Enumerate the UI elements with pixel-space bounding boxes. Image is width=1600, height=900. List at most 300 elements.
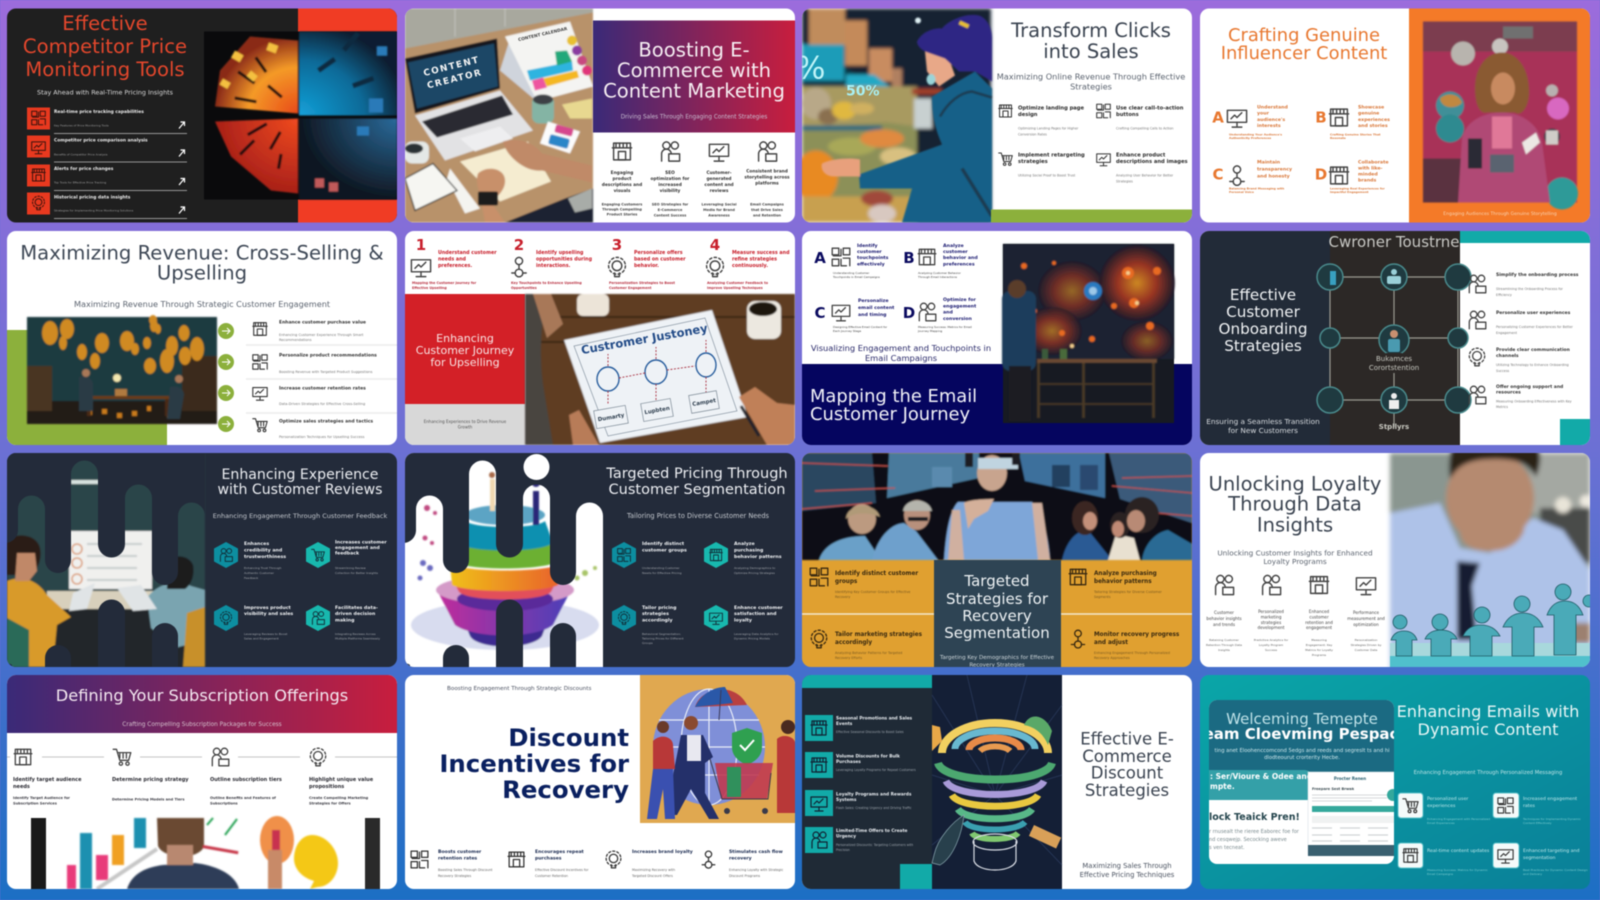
tactics grid: Identify distinct — [642, 541, 685, 547]
item D — [1315, 160, 1389, 194]
item A: audience's — [1257, 117, 1285, 123]
benefits row: Encourages repeat — [535, 849, 585, 855]
panel: Defining Your Subscription Offerings — [7, 675, 397, 889]
item A: effectively — [857, 262, 885, 268]
panel: Targeted Pricing Through Customer Segmentation — [404, 452, 795, 668]
four steps header: refine strategies — [732, 256, 777, 262]
item B — [903, 243, 978, 279]
list text: Increase customer retention rates — [279, 386, 366, 392]
image: email template mockup: s ven tecneat. — [1209, 845, 1245, 851]
four steps header: Personalization Strategies to Boost — [609, 281, 675, 285]
item D: D — [1315, 166, 1327, 184]
panel: Discount Incentives for Recovery — [405, 675, 795, 889]
list text: Optimize sales strategies and tactics — [279, 418, 373, 424]
illustration: layered funnel with people — [405, 453, 603, 667]
four steps header: Customer Engagement — [609, 286, 652, 290]
discount list: Systems — [836, 797, 857, 803]
benefits grid: Leveraging Reviews to Boost — [244, 632, 288, 636]
list text: Enhance customer purchase value — [279, 320, 366, 326]
item C: Balancing Brand Messaging with — [1229, 186, 1284, 190]
onboarding list: Personalizing Customer Experiences for Better — [1496, 325, 1574, 329]
teal top bar — [802, 675, 932, 688]
image: email template mockup: dlodteourut crorterity Hecbe. — [1264, 755, 1340, 761]
strategy tiles: accordingly — [835, 640, 872, 646]
tactics grid: Optimize Pricing Strategies — [734, 571, 775, 575]
onboarding list: channels — [1496, 353, 1519, 359]
title: Commerce — [1082, 747, 1172, 766]
photo: tablet with customer journey: Campet — [692, 398, 717, 408]
title: Recovery — [962, 607, 1032, 625]
discount list: Events — [836, 721, 853, 727]
subtitle: Effective Pricing Techniques — [1080, 871, 1175, 879]
onboarding list: Simplify the onboarding process — [1496, 272, 1579, 278]
feature grid: rates — [1523, 803, 1536, 809]
image: email template mockup: Team Cloevming Pespace — [1195, 725, 1409, 743]
caption: Engaging Audiences Through Genuine Storytelling — [1443, 211, 1557, 217]
benefits row — [411, 849, 783, 878]
item C: Maintain — [1257, 160, 1280, 166]
strategies grid: Use clear call-to-action — [1116, 106, 1184, 112]
discount list: Limited-Time Offers to Create — [836, 828, 908, 834]
item C: Personalize — [858, 298, 889, 304]
title: Competitor Price — [23, 35, 187, 58]
four steps header: opportunities during — [536, 256, 593, 262]
strategies grid: strategies — [1018, 159, 1048, 165]
strategy text: reviews — [710, 188, 729, 194]
image: businessman viewing growth chart — [31, 816, 380, 889]
list: monitoring features: Benefits of Competitor Price Analysis — [54, 152, 108, 156]
tactics grid: Tailor pricing — [642, 605, 676, 611]
item A — [814, 243, 889, 279]
gradient header band — [593, 20, 795, 132]
item D: Collaborate — [1358, 160, 1389, 166]
title: Customer Segmentation — [609, 482, 785, 498]
feature grid: experiences — [1427, 803, 1456, 809]
red title block — [405, 294, 525, 404]
title: Upselling — [157, 262, 247, 284]
benefits row: Boosts customer — [438, 849, 482, 855]
onboarding list: Personalize user experiences — [1496, 310, 1571, 316]
photo: content creator desk — [405, 8, 593, 222]
list descriptions: Boosting Revenue with Targeted Product Suggestions — [279, 370, 373, 374]
benefits grid: Increases customer — [335, 540, 387, 546]
title: Recovery — [502, 775, 629, 804]
strategy tiles: groups — [835, 579, 858, 585]
strategy text: optimization for — [651, 176, 690, 182]
benefits grid: Enhances — [244, 541, 269, 547]
onboarding list: Metrics — [1496, 405, 1508, 409]
tactics grid: Leveraging Data Analytics for — [734, 632, 779, 636]
strategy sub text: Leveraging Social — [701, 202, 737, 206]
title: Segmentation — [944, 624, 1050, 642]
panel: Transform Clicks into Sales — [794, 8, 1192, 222]
panel: Mapping the Email Customer Journey — [802, 231, 1192, 445]
program text: measurement and — [1347, 616, 1385, 621]
item D: minded — [1358, 172, 1378, 178]
four steps header: Analyzing Customer Feedback to — [707, 281, 769, 285]
title: for Upselling — [430, 356, 500, 369]
green footer strip — [991, 210, 1192, 222]
benefits row: Boosting Sales Through Discount — [438, 868, 493, 872]
discount list: Flash Sales: Creating Urgency and Driving Traffic — [836, 806, 912, 810]
strategy tiles: and adjust — [1094, 640, 1128, 646]
benefits row: Discount Programs — [729, 874, 760, 878]
strategies grid: Conversion Rates — [1018, 132, 1047, 136]
title: Through Data — [1227, 492, 1362, 516]
green arrow buttons — [218, 323, 234, 432]
title: Strategies for — [946, 590, 1049, 608]
subtitle: Crafting Compelling Subscription Packages for Success — [122, 722, 282, 728]
item B: behavior and — [943, 255, 978, 261]
item D: and — [943, 310, 953, 316]
item C — [814, 298, 895, 333]
list descriptions — [279, 333, 373, 439]
discount list: Leveraging Loyalty Programs for Repeat Customers — [836, 768, 916, 772]
teal top bar — [1460, 231, 1590, 243]
program text: Personalized — [1258, 609, 1284, 614]
program sub text: Metrics for Loyalty — [1305, 648, 1333, 652]
dark list column — [802, 675, 932, 889]
item B: experiences — [1358, 117, 1390, 123]
title: Enhancing Emails with — [1397, 702, 1579, 721]
benefits row: recovery — [729, 856, 752, 862]
strategy text — [602, 168, 790, 194]
discount list: Urgency — [836, 834, 856, 840]
title: Effective — [1230, 286, 1296, 304]
discount list: Precision — [836, 848, 850, 852]
item B: Through Email Interactions — [917, 275, 958, 279]
subtitle: Boosting Engagement Through Strategic Discounts — [447, 686, 591, 692]
four steps header: Key Touchpoints to Enhance Upselling — [511, 281, 582, 285]
red side block — [298, 8, 397, 222]
caption: Growth — [458, 424, 473, 430]
benefits grid: Integrating Reviews Across — [335, 632, 376, 636]
tactics grid: satisfaction and — [734, 611, 776, 617]
four steps header: 1 — [416, 236, 426, 254]
tactics grid: accordingly — [642, 618, 673, 624]
step text: propositions — [309, 784, 344, 790]
list: monitoring features: Top Tools for Effective Price Tracking — [53, 180, 106, 184]
strategy sub text — [602, 202, 784, 218]
step text: Highlight unique value — [309, 777, 374, 783]
feature grid — [1398, 793, 1588, 876]
photo: tablet with customer journey: Dumarty — [597, 413, 625, 423]
strategy text: descriptions and — [602, 182, 642, 188]
title: Transform Clicks — [1010, 19, 1171, 42]
strategy text: SEO — [665, 170, 675, 176]
icons row — [612, 142, 777, 161]
program sub text: Customer Data — [1355, 648, 1377, 652]
tactics grid: Analyze — [734, 541, 755, 547]
benefits row: Targeted Discount Offers — [631, 874, 673, 878]
strategy sub text: Engaging Customers — [602, 202, 642, 206]
title: Incentives for — [439, 749, 629, 778]
image: email template mockup: ting anet Eloohenccomcond 5edgs and reeds and segreslt ts and hi — [1214, 748, 1390, 754]
item B: genuine — [1358, 110, 1379, 116]
strategy sub text: Content Success — [654, 214, 686, 218]
item C: Each Journey Stage — [833, 329, 861, 333]
shelf sale sign 50 percent: 50% — [846, 84, 880, 100]
calendar text: CONTENT CALENDAR — [518, 26, 569, 43]
item D: Leveraging Real Experiences for — [1330, 186, 1385, 190]
teal corner — [900, 864, 932, 889]
feature grid: Enhanced targeting and — [1523, 848, 1580, 854]
subtitle: Visualizing Engagement and Touchpoints in — [811, 343, 991, 353]
strategy text: Consistent brand — [746, 168, 788, 174]
feature grid: Content Effectively — [1523, 821, 1552, 825]
strategy tiles: Tailoring Strategies for Diverse Customer — [1093, 590, 1163, 594]
strategies grid: Optimize landing page — [1018, 106, 1085, 112]
illustration: striped funnel — [932, 675, 1062, 889]
program sub text: Retention Through Data — [1206, 643, 1242, 647]
onboarding list: Success — [1496, 369, 1510, 373]
strategy tiles: behavior patterns — [1094, 579, 1152, 585]
item B: preferences — [943, 262, 975, 268]
item A: your — [1257, 110, 1270, 116]
four steps header: needs and — [438, 256, 467, 262]
list icons — [253, 323, 267, 432]
title: Targeted — [963, 572, 1030, 590]
strategy text: Engaging — [611, 170, 633, 176]
title: Discount — [1091, 764, 1164, 782]
image: email template mockup: r rnusealt the rieree Eaborec foe for — [1209, 829, 1300, 835]
panel: Effective Customer Onboarding Strategies — [1200, 231, 1590, 445]
panel: Maximizing Revenue Cross-Selling and Upselling — [7, 231, 397, 445]
step text: Outline subscription tiers — [210, 777, 282, 783]
green block — [7, 330, 167, 445]
program text — [1206, 609, 1385, 630]
title: Customer — [1226, 303, 1301, 321]
list: monitoring features: Strategies for Implementing Price Monitoring Solutions — [54, 208, 134, 212]
step sub text — [13, 796, 369, 806]
strategy tiles: Segments — [1094, 595, 1111, 599]
step sub text: Determine Pricing Models and Tiers — [112, 798, 184, 802]
tactics grid: Analyzing Demographics to — [734, 566, 775, 570]
benefits grid: visibility and sales — [244, 611, 293, 617]
item A: Identify — [857, 243, 878, 249]
strategies grid: design — [1018, 112, 1038, 118]
tactics grid: Dynamic Pricing Models — [734, 636, 770, 640]
discount list: Effective Seasonal Discounts to Boost Sales — [836, 730, 904, 734]
four steps header: interactions. — [536, 263, 571, 269]
item C: C — [1212, 166, 1224, 184]
item B: Analyze — [943, 243, 964, 249]
step sub text: Subscriptions — [210, 802, 238, 806]
title: Targeted Pricing Through — [605, 466, 788, 482]
title: Effective — [62, 12, 148, 35]
strategy tiles: Enhancing Engagement Through Personalized — [1094, 651, 1170, 655]
strategy text: visuals — [614, 188, 631, 194]
panel: Targeted Strategies for Recovery Segmentation — [802, 453, 1192, 668]
strategies grid: Enhance product — [1116, 152, 1166, 158]
title: Effective E- — [1080, 730, 1174, 748]
discount list — [805, 715, 916, 853]
teal corner — [1560, 419, 1590, 445]
benefits grid: Authentic Customer — [244, 571, 275, 575]
program sub text — [1206, 638, 1382, 657]
figurines — [1390, 584, 1595, 667]
strategy text: platforms — [755, 180, 779, 186]
strategy text: generated — [706, 176, 732, 182]
image: email template mockup: : Ser/Vioure & Odee and — [1210, 772, 1312, 781]
title: Customer Journey — [416, 344, 515, 357]
benefits row: Stimulates cash flow — [729, 849, 783, 855]
benefits grid: feedback — [335, 550, 360, 556]
list text: Personalize product recommendations — [279, 352, 377, 358]
list descriptions: Personalization Techniques for Upselling Success — [279, 435, 365, 439]
subtitle: Enhancing Engagement Through Personalized Messaging — [1414, 770, 1562, 776]
tactics grid: purchasing — [734, 548, 763, 554]
strategy tiles: Analyzing Behavior Patterns for Targeted — [835, 651, 902, 655]
item B: and stories — [1358, 123, 1388, 129]
item D: Measuring Success: Metrics for Email — [918, 325, 972, 329]
four steps header: Identify upselling — [536, 250, 584, 256]
dark title column — [1200, 231, 1330, 445]
strategy tiles: Monitor recovery progress — [1094, 632, 1180, 638]
four steps header: Mapping the Customer Journey for — [412, 281, 477, 285]
subtitle: Targeting Key Demographics for Effective — [939, 655, 1055, 661]
four steps header — [411, 236, 790, 290]
subtitle: Maximizing Sales Through — [1082, 862, 1172, 870]
item A: customer — [857, 249, 882, 255]
item A: A — [1212, 108, 1224, 126]
tactics grid: loyalty — [734, 618, 752, 624]
tactics grid: Behavioral Segmentation: — [642, 632, 681, 636]
strategy sub text: Media for Brand — [703, 208, 735, 212]
benefits grid: Streamlining Review — [335, 566, 366, 570]
strategy sub text: Awareness — [708, 214, 730, 218]
shelf sale signs: % — [796, 50, 825, 86]
onboarding list: Utilizing Technology to Enhance Onboarding — [1496, 363, 1569, 367]
strategies grid: Implement retargeting — [1018, 152, 1085, 158]
benefits grid: trustworthiness — [244, 554, 286, 560]
benefits grid: Facilitates data- — [335, 605, 378, 611]
dark arch overlay — [404, 452, 603, 668]
photo: tablet with customer journey — [525, 294, 795, 445]
tactics grid: Needs for Effective Pricing — [642, 571, 682, 575]
program sub text: Retaining Customer — [1209, 638, 1240, 642]
list descriptions: Enhancing Customer Experience Through Smart — [279, 333, 364, 337]
caption: Enhancing Experiences to Drive Revenue — [424, 419, 507, 424]
title: Onboarding — [1219, 320, 1307, 338]
program text: optimization — [1353, 622, 1379, 627]
feature grid: Email Experiences — [1427, 821, 1455, 825]
list descriptions: Recommendations — [279, 338, 312, 342]
program text: retention and — [1305, 620, 1333, 625]
subtitle: Loyalty Programs — [1263, 557, 1327, 566]
onboarding list: Efficiency — [1496, 293, 1512, 297]
strategies grid: Strategies — [1116, 180, 1133, 184]
subtitle: Enhancing Engagement Through Customer Feedback — [213, 512, 387, 520]
dark arch overlay — [6, 452, 205, 668]
program sub text: Insights — [1218, 648, 1230, 652]
illustration: shoppers with globe — [640, 675, 795, 823]
image: customer journey network: Bukamces — [1376, 355, 1412, 363]
subtitle: Driving Sales Through Engaging Content Strategies — [621, 114, 767, 120]
four steps header: 2 — [514, 236, 524, 254]
onboarding list: Offer ongoing support and — [1496, 384, 1563, 390]
benefits grid: making — [335, 618, 354, 624]
strategy sub text: SEO Strategies for — [652, 202, 689, 206]
strategies grid: buttons — [1116, 112, 1139, 118]
discount list: Volume Discounts for Bulk — [836, 754, 900, 760]
image: customer journey network — [1317, 231, 1471, 445]
strategy text: storytelling across — [744, 174, 790, 180]
step icons and connector — [7, 748, 397, 766]
strategies grid: Crafting Compelling Calls to Action — [1116, 126, 1173, 130]
subtitle: Email Campaigns — [865, 353, 937, 363]
panel: Enhancing Emails with Dynamic Content — [1195, 675, 1590, 889]
strategies grid — [999, 104, 1188, 184]
panel: Enhancing Customer Journey for Upselling — [405, 231, 795, 445]
image: email template mockup: Welceming Temepte — [1226, 710, 1378, 728]
benefits row: Recovery Strategies — [438, 874, 471, 878]
strategy text: product — [613, 176, 631, 182]
program text: behavior insights — [1206, 616, 1242, 621]
gray caption block — [405, 404, 525, 445]
strategy tiles — [810, 568, 1180, 660]
strategy text: visibility — [660, 188, 681, 194]
title: Customer Journey — [810, 404, 971, 425]
step text: Determine pricing strategy — [112, 777, 189, 783]
shopper — [822, 15, 992, 223]
list: monitoring features: Key Features of Price Monitoring Tools — [54, 124, 109, 128]
program text: Customer — [1214, 610, 1234, 615]
onboarding list: Measuring Onboarding Effectiveness with Key — [1496, 400, 1572, 404]
orange side block — [1409, 8, 1590, 222]
benefits grid: Sales and Engagement — [244, 636, 279, 640]
title: Strategies — [1085, 781, 1169, 800]
strategy sub text: and Retention — [753, 214, 781, 218]
strategy sub text: Through Compelling — [602, 208, 642, 212]
panel: Effective E-Commerce Discount Strategies — [802, 675, 1192, 889]
program text: Enhanced — [1309, 609, 1330, 614]
step sub text: Strategies for Offers — [309, 802, 351, 806]
photo: team meeting behind arches — [7, 453, 205, 667]
tactics grid — [612, 541, 783, 645]
tactics grid: strategies — [642, 611, 669, 617]
strategy tiles: Analyze purchasing — [1094, 571, 1157, 577]
title: Insights — [1257, 514, 1333, 536]
item D: conversion — [943, 316, 972, 322]
item C: transparency — [1257, 166, 1292, 172]
image: orange balloons in office — [27, 315, 217, 424]
benefits row: Maximizing Recovery with — [632, 868, 675, 872]
item B: B — [903, 249, 915, 267]
navy footer — [802, 364, 1192, 445]
four steps header: 3 — [612, 236, 622, 254]
image: person viewing journey wall — [1002, 244, 1175, 423]
onboarding list — [1469, 272, 1579, 409]
item C: and timing — [858, 312, 887, 318]
row text: Alerts for price changes — [54, 166, 114, 172]
benefits row: Increases brand loyalty — [632, 849, 693, 855]
onboarding list: Provide clear communication — [1496, 347, 1570, 353]
title: with Customer Reviews — [218, 482, 382, 498]
strategies grid: Optimizing Landing Pages for Higher — [1018, 126, 1079, 130]
four steps header: preferences. — [438, 263, 472, 269]
strategy tiles: Recovery Approaches — [1094, 656, 1130, 660]
image: email template mockup: Procter Renen — [1334, 776, 1366, 781]
item B: Analyzing Customer Behavior — [918, 271, 962, 275]
strategy sub text: E-Commerce — [658, 208, 683, 212]
item A: touchpoints — [857, 255, 889, 261]
photo: tablet with customer journey: Lupbten — [644, 406, 670, 416]
list: monitoring features — [27, 108, 187, 218]
strategies grid: Utilizing Social Proof to Boost Trust — [1018, 174, 1076, 178]
program text: marketing — [1261, 614, 1282, 620]
title: Dynamic Content — [1418, 720, 1558, 739]
